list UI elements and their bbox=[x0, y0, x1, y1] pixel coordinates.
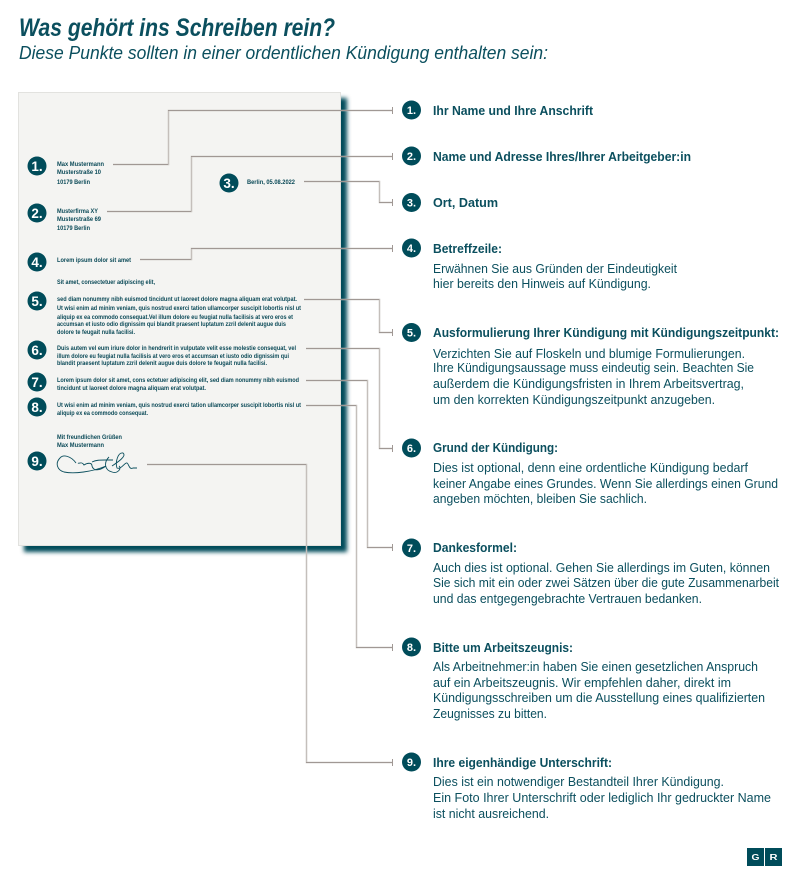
callout 9: signature: Ein Foto Ihrer Unterschrift oder lediglich Ihr gedruckter Name bbox=[433, 790, 771, 805]
callout 8: reference request: Bitte um Arbeitszeugnis: bbox=[433, 640, 573, 655]
badges on letter: 9. bbox=[31, 454, 43, 469]
letter: paragraph notice: aliquip ex ea commodo consequat.Vel illum dolore eu feugiat nulla facilisis at vero eros et bbox=[57, 314, 293, 321]
logo: GR bbox=[747, 848, 782, 866]
callout 9: signature: Ihre eigenhändige Unterschrift: bbox=[433, 755, 612, 770]
letter: place and date: Berlin, 05.08.2022 bbox=[247, 179, 296, 186]
badges on letter: 4. bbox=[31, 255, 43, 270]
letter: recipient address bbox=[57, 208, 102, 232]
connector lines bbox=[107, 107, 392, 766]
logo: GR: G bbox=[752, 853, 760, 862]
letter: closing bbox=[57, 434, 122, 449]
letter: paragraph reference: Ut wisi enim ad minim veniam, quis nostrud exerci tation ullamcorper suscipit lobortis nisl ut bbox=[57, 402, 301, 409]
letter: paragraph reason: Duis autem vel eum iriure dolor in hendrerit in vulputate velit esse molestie consequat, vel bbox=[57, 345, 296, 352]
letter: sender address: Max Mustermann bbox=[57, 161, 104, 168]
letter sheet bbox=[18, 92, 340, 546]
callout 3: place and date bbox=[402, 193, 498, 212]
callout 5: wording and date: Ihre Kündigungsaussage muss eindeutig sein. Beachten Sie bbox=[433, 360, 754, 375]
callout 5: wording and date: um den korrekten Kündigungszeitpunkt anzugeben. bbox=[433, 392, 715, 407]
callout 6: reason: 6. bbox=[407, 443, 416, 455]
callout 7: thanks: und das entgegengebrachte Vertrauen bedanken. bbox=[433, 591, 702, 606]
badges on letter: 7. bbox=[31, 375, 43, 390]
badges on letter bbox=[28, 156, 238, 470]
letter: sender address: Musterstraße 10 bbox=[57, 169, 102, 176]
badges on letter: 3. bbox=[223, 176, 235, 191]
letter: paragraph reference bbox=[57, 402, 301, 417]
letter: salutation: Sit amet, consectetuer adipiscing elit, bbox=[57, 279, 155, 286]
letter: paragraph thanks: Lorem ipsum dolor sit amet, cons ectetuer adipiscing elit, sed diam nonummy nibh euismod bbox=[57, 377, 299, 384]
letter: sender address bbox=[57, 161, 104, 186]
letter: paragraph reason bbox=[57, 345, 296, 367]
badges on letter: 8. bbox=[31, 400, 43, 415]
callout 9: signature: Dies ist ein notwendiger Bestandteil Ihrer Kündigung. bbox=[433, 774, 724, 789]
letter: paragraph reason: blandit praesent luptatum zzril delenit augue duis dolore te feugait nulla facilisi. bbox=[57, 360, 267, 367]
callout 1: name: 1. bbox=[407, 105, 416, 117]
callout 8: reference request: Als Arbeitnehmer:in haben Sie einen gesetzlichen Anspruch bbox=[433, 659, 758, 674]
callout 4: subject: Erwähnen Sie aus Gründen der Eindeutigkeit bbox=[433, 261, 677, 276]
callout 3: place and date: 3. bbox=[407, 198, 416, 210]
callout 5: wording and date: Verzichten Sie auf Floskeln und blumige Formulierungen. bbox=[433, 346, 745, 361]
letter: paragraph notice: Ut wisi enim ad minim veniam, quis nostrud exerci tation ullamcorper suscipit lobortis nisl ut bbox=[57, 305, 301, 312]
letter: closing: Mit freundlichen Grüßen bbox=[57, 434, 122, 441]
callout 3: place and date: Ort, Datum bbox=[433, 195, 498, 210]
callout 7: thanks: 7. bbox=[407, 543, 416, 555]
letter: recipient address: Musterstraße 69 bbox=[57, 216, 102, 223]
badges on letter: 2. bbox=[31, 206, 43, 221]
callout 8: reference request: auf ein Arbeitszeugnis. Wir empfehlen daher, direkt im bbox=[433, 675, 731, 690]
letter: paragraph thanks: tincidunt ut laoreet dolore magna aliquam erat volutpat. bbox=[57, 385, 206, 392]
letter: recipient address: 10179 Berlin bbox=[57, 225, 90, 232]
callout 8: reference request: 8. bbox=[407, 642, 416, 654]
callout 8: reference request: Kündigungsschreiben um die Ausstellung eines qualifizierten bbox=[433, 690, 765, 705]
panel: letter document bbox=[18, 92, 347, 552]
callout 7: thanks: Sie sich mit ein oder zwei Sätzen über die gute Zusammenarbeit bbox=[433, 575, 779, 590]
callout 4: subject: Betreffzeile: bbox=[433, 241, 502, 256]
letter: subject line: Lorem ipsum dolor sit amet bbox=[57, 257, 131, 264]
letter shadow bbox=[24, 98, 347, 552]
callout 8: reference request: Zeugnisses zu bitten. bbox=[433, 706, 547, 721]
letter: paragraph notice: dolore te feugait nulla facilisi. bbox=[57, 329, 135, 336]
letter: sender address: 10179 Berlin bbox=[57, 179, 90, 186]
callout 6: reason bbox=[402, 438, 778, 506]
callout 1: name: Ihr Name und Ihre Anschrift bbox=[433, 103, 594, 118]
letter: paragraph reference: aliquip ex ea commodo consequat. bbox=[57, 410, 148, 417]
callout 6: reason: Grund der Kündigung: bbox=[433, 440, 558, 455]
logo: GR: R bbox=[770, 853, 778, 862]
callout 7: thanks bbox=[402, 538, 779, 606]
letter: recipient address: Musterfirma XY bbox=[57, 208, 99, 215]
letter: closing: Max Mustermann bbox=[57, 442, 104, 449]
subtitle: Diese Punkte sollten in einer ordentlichen Kündigung enthalten sein: bbox=[19, 42, 548, 63]
letter: paragraph thanks bbox=[57, 377, 299, 392]
callout 2: employer: Name und Adresse Ihres/Ihrer Arbeitgeber:in bbox=[433, 149, 691, 164]
badges on letter: 5. bbox=[31, 294, 43, 309]
callout 2: employer: 2. bbox=[407, 151, 416, 163]
callout 4: subject: hier bereits den Hinweis auf Kündigung. bbox=[433, 276, 651, 291]
icon: signature bbox=[57, 453, 137, 473]
callout 6: reason: Dies ist optional, denn eine ordentliche Kündigung bedarf bbox=[433, 460, 748, 475]
callout 5: wording and date: 5. bbox=[407, 328, 416, 340]
letter: paragraph notice: sed diam nonummy nibh euismod tincidunt ut laoreet dolore magna aliquam erat volutpat. bbox=[57, 296, 297, 303]
badges on letter: 1. bbox=[31, 159, 43, 174]
callout 4: subject: 4. bbox=[407, 243, 416, 255]
letter: paragraph notice: accumsan et iusto odio dignissim qui blandit praesent luptatum zzril delenit augue duis bbox=[57, 321, 286, 328]
callout 1: name bbox=[402, 100, 594, 120]
letter: paragraph reason: illum dolore eu feugiat nulla facilisis at vero eros et accumsan et iusto odio dignissim qui bbox=[57, 353, 289, 360]
badges on letter: 6. bbox=[31, 343, 43, 358]
callout 9: signature: 9. bbox=[407, 757, 416, 769]
callout 6: reason: angeben möchten, bleiben Sie sachlich. bbox=[433, 491, 647, 506]
callout 7: thanks: Dankesformel: bbox=[433, 540, 517, 555]
callout 5: wording and date: außerdem die Kündigungsfristen in Ihrem Arbeitsvertrag, bbox=[433, 376, 744, 391]
letter: paragraph notice bbox=[57, 296, 301, 336]
callout 4: subject bbox=[402, 238, 677, 291]
callout 5: wording and date bbox=[402, 323, 779, 407]
callout 8: reference request bbox=[402, 638, 765, 721]
callout 7: thanks: Auch dies ist optional. Gehen Sie allerdings im Guten, können bbox=[433, 560, 770, 575]
callout 2: employer bbox=[402, 146, 691, 166]
title: Was gehört ins Schreiben rein? bbox=[19, 14, 335, 42]
callout 9: signature: ist nicht ausreichend. bbox=[433, 806, 549, 821]
callout 9: signature bbox=[402, 752, 771, 821]
callout 6: reason: keiner Angabe eines Grundes. Wenn Sie allerdings einen Grund bbox=[433, 476, 778, 491]
